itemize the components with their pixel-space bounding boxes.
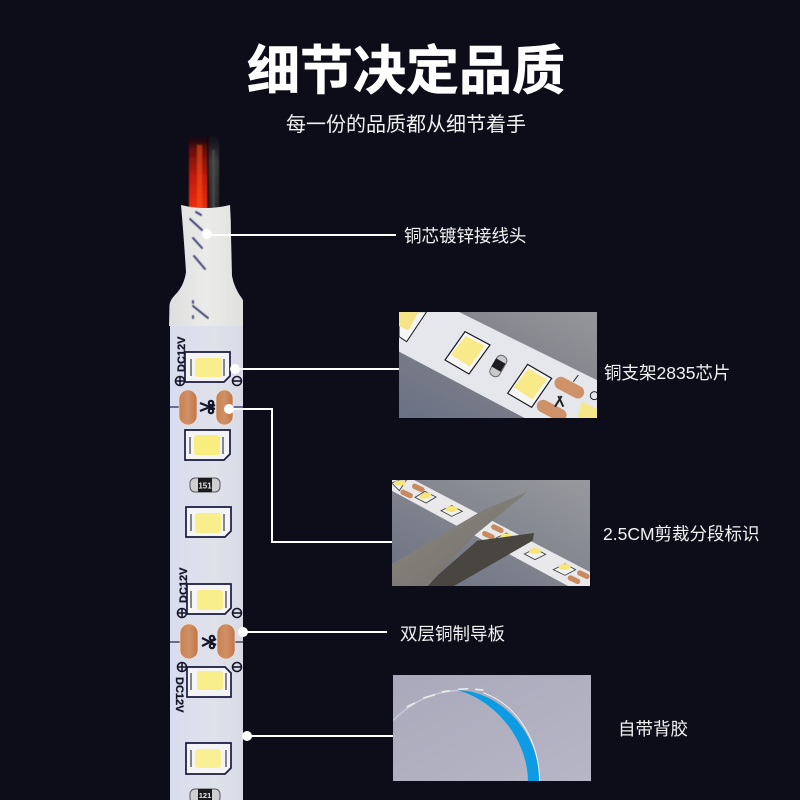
copper pads (170, 390, 243, 659)
callout: copper zinc-plated wire head: 铜芯镀锌接线头 (404, 226, 526, 246)
callout: copper zinc-plated wire head (202, 226, 526, 246)
callout: double-layer copper board: 双层铜制导板 (400, 624, 505, 644)
subtitle: 每一份的品质都从细节着手 (286, 113, 526, 136)
wires: red and black (189, 135, 219, 210)
LED strip illustration (169, 135, 243, 800)
scissors marks (200, 401, 216, 648)
resistors (190, 478, 220, 800)
callout: copper bracket 2835 chip: 铜支架2835芯片 (604, 363, 730, 383)
callout: 2.5CM cut mark: 2.5CM剪裁分段标识 (603, 524, 760, 544)
polarity marks (176, 376, 242, 672)
resistors: 121 (199, 791, 211, 800)
callout: self-adhesive backing (242, 719, 688, 741)
strip markings (173, 336, 190, 713)
LED chips (185, 352, 231, 774)
strip body (170, 322, 243, 800)
connector sleeve (169, 205, 243, 326)
callout: copper bracket 2835 chip (230, 363, 730, 383)
photo: adhesive backing (393, 675, 591, 782)
strip markings: DC12V (178, 567, 190, 603)
strip markings: DC12V (173, 677, 185, 713)
photo: copper bracket 2835 chip (399, 312, 600, 424)
title: 细节决定品质 (247, 42, 565, 101)
callout: double-layer copper board (238, 624, 505, 644)
callout: 2.5CM cut mark (224, 404, 760, 544)
photo: scissors cutting strip (392, 480, 591, 588)
DC12V mark top: DC12V (176, 336, 188, 372)
callout: self-adhesive backing: 自带背胶 (618, 719, 688, 739)
resistors: 151 (198, 482, 212, 490)
